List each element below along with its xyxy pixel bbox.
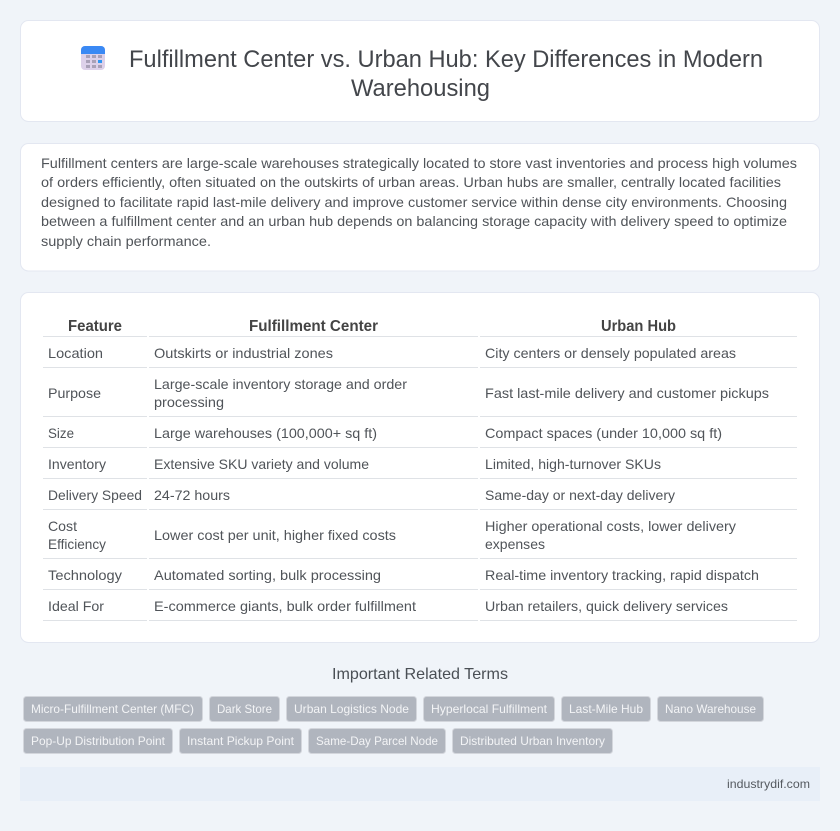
table header: Urban Hub [601,318,676,335]
panel: title header [20,20,820,122]
tag [24,696,202,722]
tag [452,728,612,754]
row: size: Size [48,425,74,441]
row: delivery speed: Same-day or next-day delivery [485,487,675,503]
tag: Hyperlocal Fulfillment [431,702,548,716]
row: size [48,425,722,441]
row: cost efficiency: Lower cost per unit, higher fixed costs [154,527,396,543]
tag: Micro-Fulfillment Center (MFC) [31,702,194,716]
tag: Last-Mile Hub [569,702,643,716]
row: cost efficiency: Efficiency [48,536,106,552]
row: purpose: processing [154,394,224,410]
row: location: Outskirts or industrial zones [154,345,333,361]
heading: related terms: Important Related Terms [332,666,508,683]
panel: comparison table [20,292,820,642]
footer [20,767,820,801]
tag: Nano Warehouse [665,702,756,716]
tag: Distributed Urban Inventory [460,734,605,748]
row: location: City centers or densely populated areas [485,345,736,361]
tag: Pop-Up Distribution Point [31,734,166,748]
row: inventory [48,456,661,472]
row: cost efficiency: Higher operational costs, lower delivery [485,518,736,534]
title: Warehousing [351,75,490,102]
text block: description: Fulfillment centers are large-scale warehouses strategically located to store vast inventories and process high volumes [41,155,797,171]
row: cost efficiency: expenses [485,536,545,552]
row: ideal for: Urban retailers, quick delivery services [485,598,728,614]
row: ideal for: E-commerce giants, bulk order fulfillment [154,598,416,614]
row: delivery speed [48,487,675,503]
table header: Fulfillment Center [249,318,378,335]
tag: Dark Store [217,702,272,716]
row: technology [48,567,759,583]
panel: description [20,144,820,271]
text block: description: designed to facilitate rapid last-mile delivery and improve customer service within dense city environments. Choosing [41,194,787,210]
row: ideal for [48,598,728,614]
tag: Instant Pickup Point [187,734,295,748]
row: inventory: Extensive SKU variety and volume [154,456,369,472]
row: purpose: Purpose [48,385,101,401]
tag [24,728,172,754]
tag [210,696,280,722]
row: technology: Technology [48,567,122,583]
row: location: Location [48,345,103,361]
row: size: Compact spaces (under 10,000 sq ft) [485,425,722,441]
row: size: Large warehouses (100,000+ sq ft) [154,425,377,441]
tag [424,696,554,722]
title [129,46,763,102]
tag [562,696,650,722]
row: delivery speed: 24-72 hours [154,487,230,503]
icon: calendar grid [81,46,105,70]
text block: description: of orders efficiently, often situated on the outskirts of urban areas. Urban hubs are smaller, centrally located facilities [41,174,781,190]
row: purpose [48,376,769,410]
row: ideal for: Ideal For [48,598,104,614]
related term tags [24,696,764,754]
footer: industrydif.com [727,777,810,791]
title: Fulfillment Center vs. Urban Hub: Key Differences in Modern [129,46,763,73]
text block: description: between a fulfillment center and an urban hub depends on balancing storage capacity with delivery speed to optimize [41,213,787,229]
row: location [48,345,736,361]
row: inventory: Inventory [48,456,106,472]
tag: Same-Day Parcel Node [316,734,438,748]
row: cost efficiency [48,518,736,552]
row: delivery speed: Delivery Speed [48,487,142,503]
tag [658,696,764,722]
table header: Feature [68,318,122,335]
tag [180,728,302,754]
tag: Urban Logistics Node [294,702,409,716]
row: purpose: Large-scale inventory storage and order [154,376,407,392]
table header [68,318,676,335]
text block: description [41,155,797,249]
row: purpose: Fast last-mile delivery and customer pickups [485,385,769,401]
row: technology: Automated sorting, bulk processing [154,567,381,583]
row: cost efficiency: Cost [48,518,77,534]
tag [308,728,446,754]
row: inventory: Limited, high-turnover SKUs [485,456,661,472]
row: technology: Real-time inventory tracking, rapid dispatch [485,567,759,583]
tag [286,696,416,722]
text block: description: supply chain performance. [41,233,211,249]
